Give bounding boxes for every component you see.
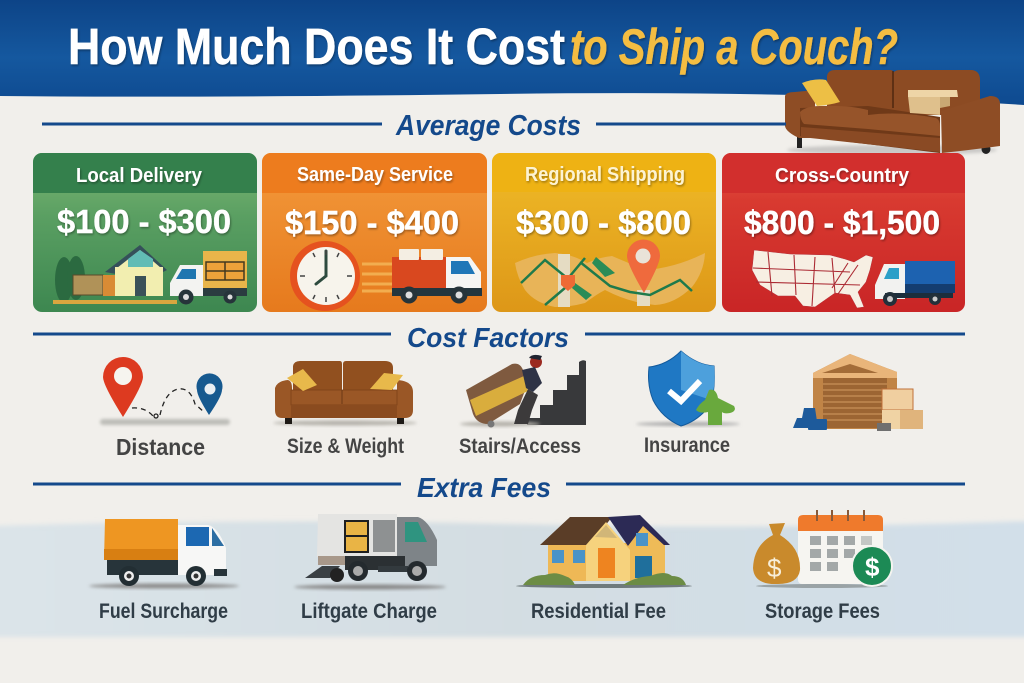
section heading: Cost Factors	[33, 322, 965, 353]
panel: Cross-Country: $800 - $1,500	[744, 204, 940, 241]
factor: Distance	[100, 357, 230, 460]
icon: road map with location pin	[515, 240, 705, 307]
section heading: Average Costs: Average Costs	[395, 110, 581, 142]
factor: Size & Weight: Size & Weight	[287, 435, 404, 458]
seat and base	[800, 106, 940, 153]
icon: shield with checkmark	[636, 351, 740, 426]
right arm	[941, 96, 1000, 153]
panel: Local Delivery	[33, 153, 257, 312]
panel: Local Delivery: Local Delivery	[76, 165, 203, 187]
box on couch	[908, 96, 940, 115]
section heading: Extra Fees: Extra Fees	[417, 472, 551, 503]
icon: clock and speeding truck	[290, 241, 482, 311]
panel: Regional Shipping	[492, 153, 716, 312]
title: How Much Does It Cost	[68, 18, 565, 75]
fee: Residential Fee: Residential Fee	[531, 600, 666, 623]
panel: extra fees band	[0, 521, 1024, 637]
factor: storage unit illustration	[793, 354, 923, 431]
fee: Liftgate Charge: Liftgate Charge	[301, 600, 437, 623]
icon: orange cargo truck	[89, 519, 239, 588]
icon: money bag and calendar: $	[767, 553, 782, 583]
fee: Storage Fees: Storage Fees	[765, 600, 880, 623]
icon: US map and blue truck	[752, 250, 955, 308]
panel: Same-Day Service: $150 - $400	[285, 204, 459, 241]
factor: Insurance	[636, 351, 740, 457]
illustration: brown couch with box	[785, 70, 1000, 155]
icon: liftgate truck	[294, 514, 446, 590]
icon: money bag and calendar	[753, 510, 892, 588]
fee: Residential Fee	[516, 515, 692, 623]
panel: Same-Day Service	[262, 153, 487, 312]
panel: Cross-Country	[722, 153, 965, 312]
icon: couch with pillows	[273, 361, 417, 426]
header banner	[0, 0, 1024, 105]
factor: Size & Weight	[273, 361, 417, 458]
factor: Stairs/Access	[459, 355, 586, 458]
icon: route pins	[100, 357, 230, 425]
icon: yellow house with bushes	[516, 515, 692, 588]
panel: Regional Shipping: $300 - $800	[516, 204, 691, 241]
section heading: Cost Factors: Cost Factors	[407, 322, 569, 353]
panel: Same-Day Service: Same-Day Service	[297, 164, 453, 186]
fee: Storage Fees	[753, 510, 892, 623]
couch back	[827, 70, 894, 115]
left arm	[785, 90, 815, 138]
panel: Local Delivery: $100 - $300	[57, 203, 231, 240]
factor: Distance: Distance	[116, 434, 205, 460]
section heading: Extra Fees	[33, 472, 965, 503]
fee: Fuel Surcharge: Fuel Surcharge	[99, 600, 228, 623]
factor: Insurance: Insurance	[644, 434, 730, 457]
title	[68, 18, 898, 75]
pillow	[802, 79, 840, 106]
icon: mover pushing couch up stairs	[460, 355, 586, 428]
panel: Regional Shipping: Regional Shipping	[525, 164, 685, 186]
title: to Ship a Couch?	[570, 19, 898, 75]
icon: money bag and calendar: $	[865, 552, 880, 582]
fee: Liftgate Charge	[294, 514, 446, 623]
icon: house, trees and delivery truck	[53, 245, 247, 304]
factor: Stairs/Access: Stairs/Access	[459, 435, 581, 458]
panel: Cross-Country: Cross-Country	[775, 165, 910, 187]
section heading: Average Costs	[42, 110, 786, 142]
fee: Fuel Surcharge	[89, 519, 239, 623]
